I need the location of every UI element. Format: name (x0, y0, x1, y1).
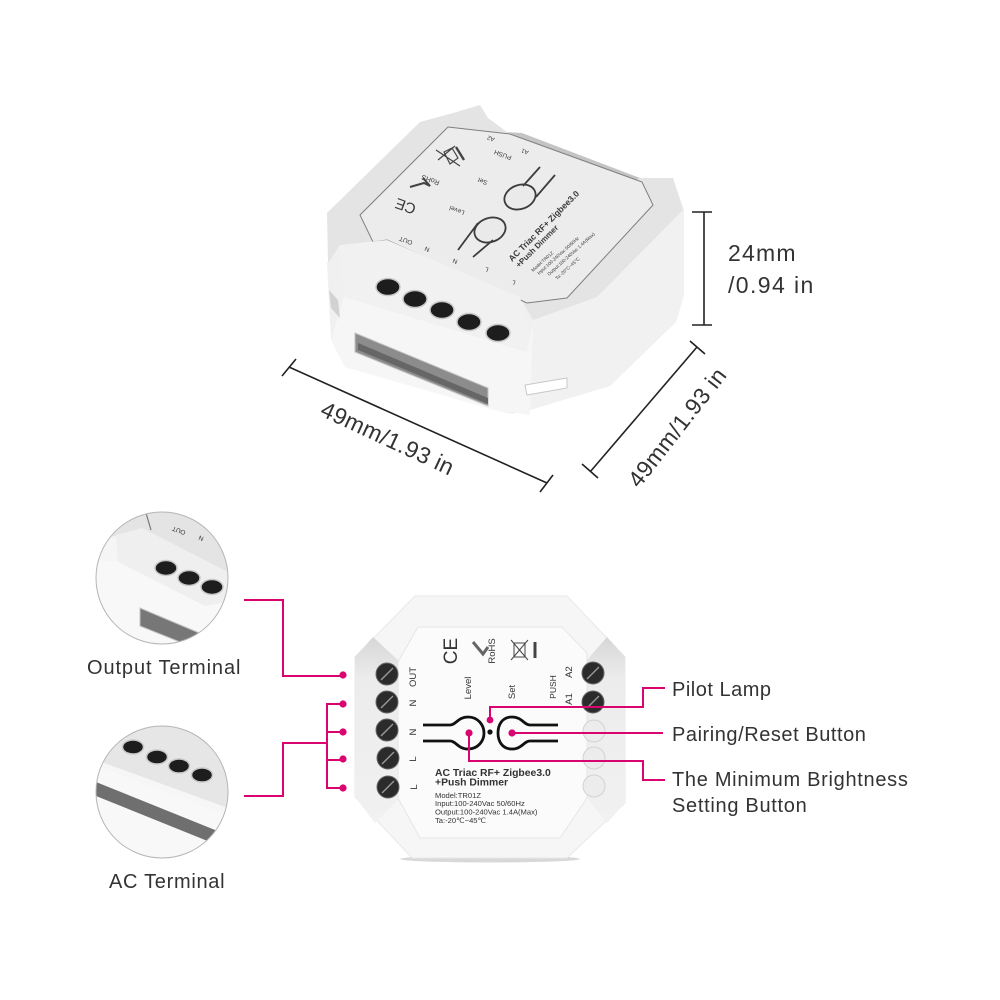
icon: waste bin mark (436, 146, 464, 166)
terminal labels: Level (463, 677, 474, 699)
terminal labels: A1 (564, 693, 575, 705)
centre plate (398, 627, 587, 838)
plate text: specifications: Output:100-240Vac 1.4A(Max) (435, 808, 538, 816)
detail circle outline: output terminal (96, 512, 228, 644)
dimension: side width (582, 341, 705, 478)
terminal labels: PUSH (548, 675, 558, 699)
terminal labels: N (408, 728, 419, 735)
outer shell (355, 596, 625, 858)
shadow (400, 856, 580, 862)
detail circle: AC terminal (96, 726, 228, 840)
label: height: /0.94 in (728, 272, 815, 298)
connector: AC terminal (244, 704, 343, 796)
connector: pairing button (508, 729, 663, 737)
printed labels on top face: A1 (520, 146, 530, 155)
detail circle outline: AC terminal (96, 726, 228, 858)
terminal labels: N (408, 699, 419, 706)
wire slot (355, 333, 488, 406)
connector: output terminal (244, 600, 343, 676)
connector dots: left (339, 671, 347, 792)
plate text: specifications: Model:TR01Z (435, 791, 481, 800)
label: minimum brightness: Setting Button (672, 795, 807, 817)
label: pairing reset button: Pairing/Reset Button (672, 724, 866, 746)
left screws (376, 663, 399, 798)
connector: minimum brightness button (465, 729, 665, 780)
dimension: front width (282, 359, 553, 492)
terminal labels: L (409, 784, 420, 790)
printed labels on top face: L (511, 278, 517, 286)
module body (327, 178, 684, 414)
keyhole button: level (423, 717, 484, 749)
plate text: specifications (435, 791, 538, 825)
printed plate (360, 127, 653, 303)
product photo: angled module (327, 105, 684, 415)
screw slots (381, 667, 599, 793)
label: output terminal: Output Terminal (87, 657, 241, 679)
terminal screw holes (376, 278, 510, 342)
keyhole buttons (458, 167, 555, 257)
connector: pilot lamp (487, 688, 665, 723)
label: height (728, 240, 815, 298)
dimension: height 24mm (692, 212, 712, 325)
label: minimum brightness: The Minimum Brightness (672, 769, 909, 791)
module top face (327, 105, 683, 320)
printed labels on top face: Output:100-240Vac 1.4A(Max) (546, 231, 596, 277)
icon: RoHS tick (410, 178, 430, 187)
label: front width: 49mm/1.93 in (317, 396, 459, 480)
printed labels on top face: OUT (398, 234, 414, 246)
printed labels on top face: PUSH (493, 148, 513, 161)
plate text: title: +Push Dimmer (435, 778, 508, 788)
icon: RoHS tick (473, 642, 488, 654)
plate text: title: AC Triac RF+ Zigbee3.0 (435, 768, 551, 779)
detail circle: output terminal: N (198, 533, 205, 542)
icon: waste bin mark (511, 640, 535, 660)
printed labels on top face: N (452, 256, 459, 265)
rear shadow band (507, 132, 640, 181)
side notch (329, 290, 340, 318)
printed labels on top face: +Push Dimmer (514, 223, 560, 269)
terminal labels: Set (507, 685, 518, 699)
printed labels on top face: Level (448, 204, 466, 216)
keyhole button: set (498, 717, 558, 749)
printed labels on top face: Set (477, 176, 489, 186)
label: height: 24mm (728, 240, 797, 266)
detail circle: output terminal: OUT (171, 524, 187, 536)
right screws (582, 662, 604, 713)
product photo: front view (355, 596, 625, 862)
side clip (525, 378, 567, 395)
printed labels on top face: AC Triac RF+ Zigbee3.0 (506, 188, 581, 263)
terminal labels (408, 638, 575, 790)
printed labels on top face: CE (393, 194, 418, 217)
right terminal strip (587, 637, 625, 823)
printed labels on top face: Ta:-20°C~45°C (554, 256, 581, 281)
printed labels on top face: RoHS (420, 173, 441, 186)
icon: CE mark: CE (441, 638, 462, 664)
plate text: title (435, 768, 551, 788)
pilot lamp (487, 729, 493, 735)
label: pilot lamp: Pilot Lamp (672, 679, 772, 701)
label: AC terminal: AC Terminal (109, 871, 225, 893)
plate text: specifications: Input:100-240Vac 50/60Hz (435, 799, 525, 808)
printed labels on top face: Input:100-240Vac 50/60Hz (536, 235, 581, 276)
printed labels on top face (393, 133, 596, 286)
terminal labels: L (408, 756, 419, 762)
printed labels on top face: Model:TR01Z (530, 250, 554, 273)
label: side width: 49mm/1.93 in (622, 362, 732, 492)
plate text: specifications: Ta:-20℃~45℃ (435, 816, 487, 825)
printed labels on top face: A2 (486, 133, 496, 142)
terminal labels: RoHS (487, 638, 498, 664)
terminal labels: A2 (564, 666, 575, 678)
printed labels on top face: L (484, 265, 490, 273)
label: minimum brightness (672, 769, 909, 817)
printed labels on top face: N (424, 244, 431, 253)
left terminal strip (355, 637, 400, 823)
detail circle: output terminal (96, 512, 228, 646)
terminal block (340, 240, 533, 352)
empty terminal positions (583, 720, 605, 797)
terminal labels: OUT (408, 667, 419, 687)
